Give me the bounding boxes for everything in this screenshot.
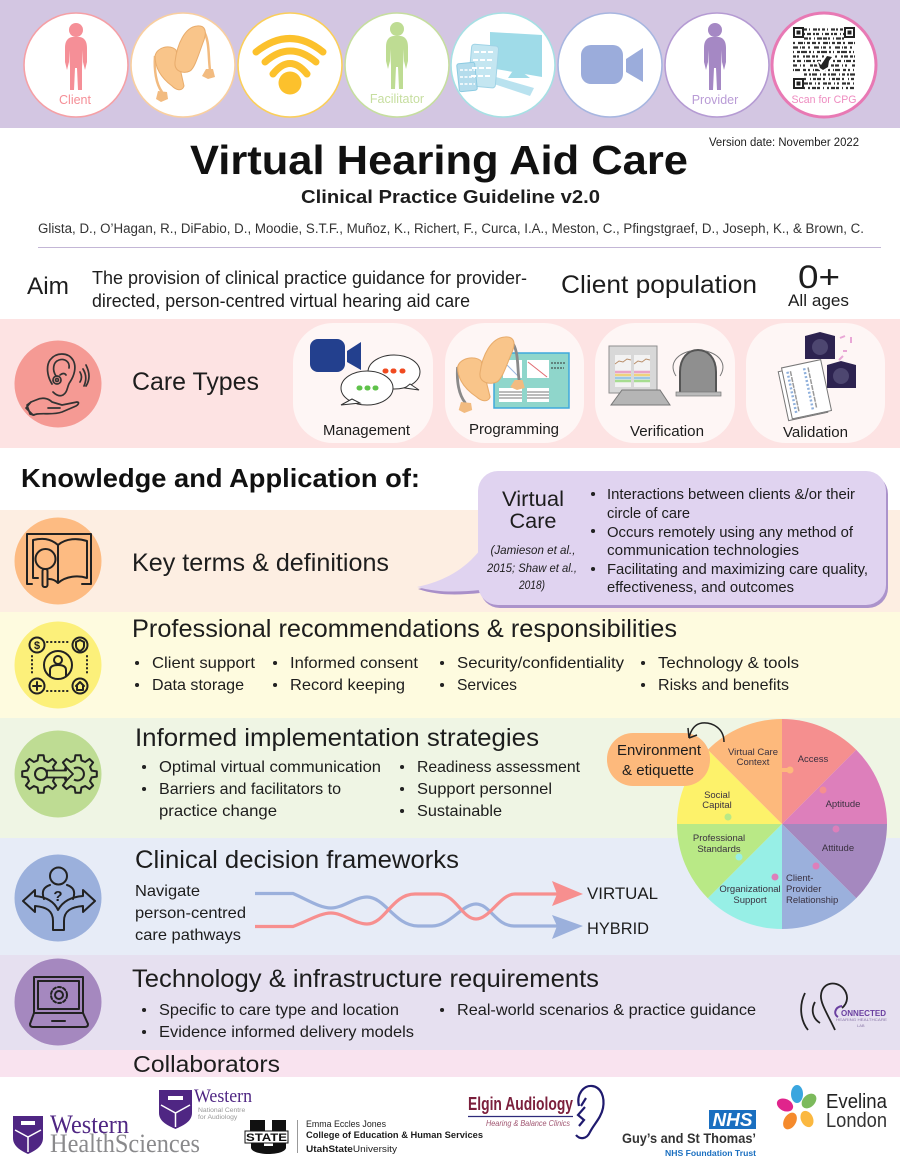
logo: evelina london: London — [826, 1110, 887, 1132]
panel: clinical decision frameworks — [14, 846, 658, 944]
heading: Informed implementation strategies — [135, 724, 539, 752]
wheel diagram: Capital — [702, 800, 732, 811]
heading: Key terms & definitions — [132, 549, 389, 577]
logo: western health sciences: HealthSciences — [50, 1129, 200, 1158]
heading: knowledge and application: Knowledge and Application of: — [21, 463, 420, 493]
icon: client support network: $ — [34, 640, 40, 652]
logo: national centre for audiology: National Centre — [198, 1107, 245, 1114]
icon: gears — [14, 730, 102, 818]
client population: Client population — [561, 271, 757, 299]
pathway labels — [587, 884, 658, 938]
icon: video camera — [558, 13, 662, 117]
callout: environment and etiquette — [607, 723, 724, 786]
icon: wifi — [238, 13, 342, 117]
panel: implementation strategies — [14, 724, 581, 820]
card: verification: Verification — [630, 424, 704, 440]
text — [135, 883, 246, 944]
icon: client: Client — [59, 93, 92, 107]
subtitle: Clinical Practice Guideline v2.0 — [301, 187, 600, 207]
logo: evelina london: Evelina — [826, 1091, 888, 1113]
bullet list: Services — [457, 677, 517, 694]
heading: Clinical decision frameworks — [135, 846, 459, 874]
wheel diagram: Client- — [786, 873, 813, 884]
logo: national centre for audiology: Western — [194, 1086, 252, 1107]
icon: facilitator — [345, 13, 449, 117]
title: Virtual Hearing Aid Care — [190, 137, 688, 183]
icon: provider: Provider — [692, 93, 738, 107]
logo: utah state university: STATE — [246, 1132, 287, 1144]
bullet list — [144, 759, 581, 820]
panel: key terms — [14, 518, 389, 604]
bullet list: practice change — [159, 803, 277, 820]
bullet list: Security/confidentiality — [457, 655, 624, 672]
callout: virtual care — [417, 471, 888, 608]
heading: Technology & infrastructure requirements — [132, 965, 599, 993]
callout: virtual care: (Jamieson et al., — [490, 545, 576, 557]
logo: utah state university: College of Education & Human Services — [306, 1130, 483, 1141]
callout: virtual care: Care — [510, 510, 556, 533]
panel: professional recommendations — [14, 615, 799, 708]
bullet list: Risks and benefits — [658, 677, 789, 694]
callout: virtual care: circle of care — [607, 506, 690, 522]
wheel diagram: Attitude — [822, 843, 854, 854]
pathway labels: VIRTUAL — [587, 884, 658, 903]
wheel diagram: Provider — [786, 884, 821, 895]
aim: directed, person-centred virtual hearing aid care — [92, 291, 470, 311]
panel: care types — [14, 323, 885, 443]
callout: virtual care: Occurs remotely using any method of — [607, 525, 854, 541]
callout: virtual care: 2018) — [518, 580, 545, 592]
callout: virtual care: Facilitating and maximizing care quality, — [607, 562, 868, 578]
logo: utah state university: Emma Eccles Jones — [306, 1119, 386, 1130]
client population — [561, 259, 849, 310]
wheel diagram — [677, 719, 887, 929]
QR code: Scan for CPG — [792, 94, 856, 106]
arrow: loop to environment — [688, 723, 724, 742]
card: programming — [445, 323, 584, 443]
bullet list: Client support — [152, 655, 256, 672]
callout: virtual care: 2015; Shaw et al., — [486, 563, 577, 575]
logo: western health sciences: Western — [50, 1110, 129, 1139]
logo: guys and st thomas nhs — [622, 1110, 756, 1158]
icon: computer and keypads — [451, 13, 555, 117]
text: Navigate — [135, 883, 200, 900]
bullet list: Specific to care type and location — [159, 1002, 399, 1019]
icon: laptop with gear — [14, 958, 102, 1046]
pathway labels: HYBRID — [587, 919, 649, 938]
icon: client — [24, 13, 128, 117]
bullet list: Readiness assessment — [417, 759, 581, 776]
version date: Version date: November 2022 — [709, 137, 859, 149]
icon: ear and hand — [14, 340, 102, 428]
wheel diagram: Aptitude — [826, 799, 860, 810]
aim: The provision of clinical practice guidance for provider- — [92, 268, 527, 288]
heading: Care Types — [132, 368, 259, 396]
wheel diagram: Organizational — [719, 884, 781, 895]
client population: 0+ — [798, 259, 840, 295]
logo: guys and st thomas nhs: Guy’s and St Thomas’ — [622, 1131, 756, 1146]
wheel diagram: Support — [733, 895, 767, 906]
logo: elgin audiology: Elgin Audiology — [468, 1094, 573, 1114]
QR code — [772, 13, 876, 117]
icon: hearing aid — [131, 13, 235, 117]
callout: environment and etiquette: & etiquette — [622, 763, 694, 779]
client population: All ages — [788, 291, 849, 310]
callout: virtual care: communication technologies — [607, 543, 799, 559]
logo: connected hearing healthcare lab: ONNECTED — [841, 1009, 886, 1018]
wheel diagram: Context — [737, 757, 770, 768]
bullet list: Sustainable — [417, 803, 502, 820]
logo: elgin audiology — [468, 1086, 604, 1138]
bullet list: Record keeping — [290, 677, 405, 694]
icon: client support network — [14, 622, 102, 708]
icon: facilitator: Facilitator — [370, 92, 424, 106]
bullet list: Optimal virtual communication — [159, 759, 381, 776]
card: programming: Programming — [469, 422, 559, 438]
logo: connected hearing healthcare lab: LAB — [857, 1023, 865, 1028]
bullet list — [144, 1002, 756, 1041]
bullet list: Real-world scenarios & practice guidance — [457, 1002, 756, 1019]
bullet list — [137, 655, 799, 694]
bullet list: Technology & tools — [658, 655, 799, 672]
bullet list: Barriers and facilitators to — [159, 781, 341, 798]
card: verification — [595, 323, 735, 443]
callout: virtual care: Virtual — [502, 488, 564, 511]
wheel diagram: Virtual Care — [728, 747, 778, 758]
logo: utah state university: UtahState University — [306, 1144, 397, 1155]
icon: crossroads decision — [14, 854, 102, 942]
callout: environment and etiquette: Environment — [617, 743, 701, 759]
callout: virtual care: effectiveness, and outcomes — [607, 580, 794, 596]
bullet list: Evidence informed delivery models — [159, 1024, 414, 1041]
card: validation — [746, 323, 885, 443]
logo: guys and st thomas nhs: NHS Foundation Trust — [665, 1148, 756, 1158]
bullet list: Support personnel — [417, 781, 552, 798]
card: validation: Validation — [783, 425, 848, 441]
icon: book and magnifier — [14, 518, 102, 604]
logo: western health sciences — [13, 1110, 200, 1158]
wheel diagram: Access — [798, 754, 829, 765]
logo: utah state university — [245, 1119, 483, 1155]
aim: Aim — [27, 273, 69, 300]
logo: national centre for audiology: for Audiology — [198, 1114, 238, 1121]
pathway ribbons and arrows — [255, 881, 583, 939]
authors: Glista, D., O’Hagan, R., DiFabio, D., Moodie, S.T.F., Muñoz, K., Richert, F., Curca, I.A., Meston, C., Pfingstgraef, D., Joseph, K., & Brown, C. — [38, 221, 864, 236]
logo: connected hearing healthcare lab: HEARING HEALTHCARE — [836, 1017, 887, 1022]
logo: national centre for audiology — [159, 1086, 252, 1129]
wheel diagram: Relationship — [786, 895, 838, 906]
logo: connected hearing healthcare lab — [801, 984, 887, 1030]
bullet list: Informed consent — [290, 655, 419, 672]
panel: technology and infrastructure — [14, 958, 887, 1046]
callout: virtual care: Interactions between clients &/or their — [607, 487, 855, 503]
wheel diagram: Professional — [693, 833, 745, 844]
icon: provider — [665, 13, 769, 117]
card: management — [293, 323, 433, 443]
heading: Professional recommendations & responsibilities — [132, 615, 677, 643]
logo: evelina london — [775, 1085, 888, 1132]
text: person-centred — [135, 905, 246, 922]
aim — [27, 268, 527, 311]
wheel diagram: Social — [704, 790, 730, 801]
text: care pathways — [135, 927, 241, 944]
card: management: Management — [323, 423, 410, 439]
wheel diagram: Standards — [697, 844, 741, 855]
bullet list: Data storage — [152, 677, 244, 694]
heading: collaborators: Collaborators — [133, 1051, 280, 1077]
icon: crossroads decision: ? — [53, 888, 63, 905]
logo: guys and st thomas nhs: NHS — [712, 1110, 752, 1130]
logo: elgin audiology: Hearing & Balance Clinics — [486, 1118, 571, 1128]
